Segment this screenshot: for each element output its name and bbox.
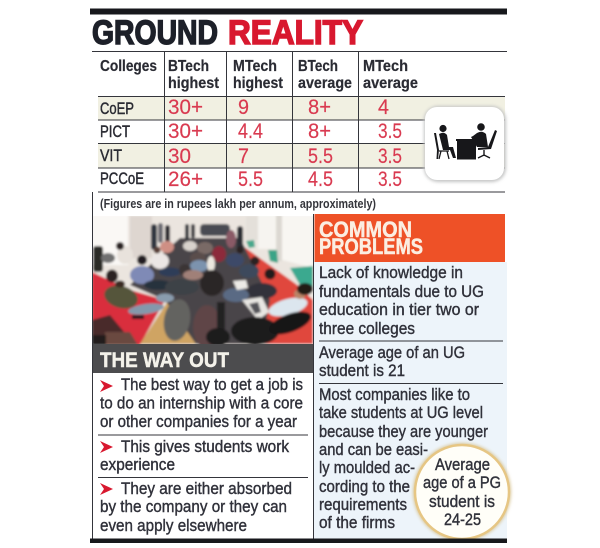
icon: interview at a desk <box>424 106 506 182</box>
row: PCCoE <box>100 168 402 191</box>
problem: companies prefer UG: because they are younger <box>319 423 488 441</box>
point: absorbed or apply <box>100 480 292 535</box>
photo people right <box>223 256 314 345</box>
row: PCCoE: 26+ <box>168 168 203 191</box>
problem: companies prefer UG: requirements <box>319 496 407 514</box>
row: PICT: 30+ <box>168 120 203 143</box>
row: CoEP: 4 <box>378 96 389 119</box>
table: salaries by college <box>92 51 507 192</box>
row: PCCoE: 3.5 <box>378 168 402 191</box>
row: CoEP: 9 <box>238 96 249 119</box>
point: internship: to do an internship with a core <box>100 394 303 412</box>
row: VIT: 30 <box>168 145 191 168</box>
point: absorbed or apply: They are either absorbed <box>121 480 292 498</box>
row: PICT: 8+ <box>308 120 331 143</box>
table header: MTech <box>233 58 277 75</box>
problem: companies prefer UG: and can be easi- <box>319 441 428 459</box>
table header <box>100 58 418 92</box>
row: PICT <box>100 120 402 143</box>
heading band <box>93 344 313 373</box>
row: PICT: PICT <box>100 122 130 141</box>
table header: average <box>298 75 352 92</box>
heading: PROBLEMS <box>319 234 423 259</box>
row: VIT <box>100 145 402 168</box>
bottom rule <box>90 538 507 543</box>
callout: PG student age: student is <box>429 493 495 511</box>
title: GROUND <box>92 14 218 52</box>
problem: UG age <box>319 344 465 380</box>
heading band: THE WAY OUT <box>100 348 229 372</box>
row: PCCoE: 4.5 <box>308 168 333 191</box>
problem: companies prefer UG: Most companies like to <box>319 386 470 404</box>
point: work experience: This gives students work <box>121 438 290 456</box>
row: VIT: 5.5 <box>308 145 333 168</box>
row: CoEP: 30+ <box>168 96 203 119</box>
panel: the way out <box>93 344 313 535</box>
heading <box>314 214 505 262</box>
heading: COMMON <box>319 217 412 242</box>
callout: PG student age <box>413 443 511 541</box>
photo people left <box>93 242 174 319</box>
row: PICT: 4.4 <box>238 120 263 143</box>
row: CoEP <box>100 96 389 119</box>
problem: fundamentals: three colleges <box>319 320 415 338</box>
infographic <box>90 8 513 543</box>
problem: companies prefer UG: of the firms <box>319 514 395 532</box>
problem: companies prefer UG: take students at UG level <box>319 404 483 422</box>
table header: highest <box>168 75 219 92</box>
left frame rule <box>92 192 94 539</box>
problem: UG age: Average age of an UG <box>319 344 465 362</box>
callout: PG student age: age of a PG <box>423 474 501 492</box>
table header: Colleges <box>100 58 157 75</box>
row: PCCoE: PCCoE <box>100 169 144 188</box>
table header: highest <box>233 75 283 92</box>
row: CoEP: 8+ <box>308 96 331 119</box>
problem: UG age: student is 21 <box>319 362 405 380</box>
row: VIT: 3.5 <box>378 145 402 168</box>
table header: BTech <box>168 58 209 75</box>
problem: companies prefer UG: cording to the <box>319 478 410 496</box>
problem: fundamentals: education in tier two or <box>319 301 479 319</box>
row: PICT: 3.5 <box>378 120 402 143</box>
title <box>92 14 363 52</box>
row: CoEP: CoEP <box>100 99 134 118</box>
title: REALITY <box>228 14 363 52</box>
problem: companies prefer UG: ly moulded ac- <box>319 459 415 477</box>
footnote: (Figures are in rupees lakh per annum, approximately) <box>100 197 376 211</box>
point: absorbed or apply: by the company or they can <box>100 498 287 516</box>
point: absorbed or apply: even apply elsewhere <box>100 517 247 535</box>
panel: common problems <box>314 214 511 541</box>
photo people centre <box>161 270 230 349</box>
photo crowd base <box>130 238 270 344</box>
problem: fundamentals: Lack of knowledge in <box>319 264 463 282</box>
point: work experience: experience <box>100 456 175 474</box>
table header: MTech <box>363 58 408 75</box>
point: internship: or other companies for a year <box>100 413 297 431</box>
row: PCCoE: 5.5 <box>238 168 263 191</box>
row: VIT: VIT <box>100 146 122 165</box>
point: work experience <box>100 438 290 474</box>
table header: BTech <box>298 58 338 75</box>
row: VIT: 7 <box>238 145 249 168</box>
callout: PG student age: 24-25 <box>444 511 481 529</box>
photo crowd at back <box>151 223 244 276</box>
photo: students at a placement hall <box>92 215 314 349</box>
point: internship <box>100 376 303 431</box>
problem: fundamentals <box>319 264 484 338</box>
problem: fundamentals: fundamentals due to UG <box>319 283 484 301</box>
point: internship: The best way to get a job is <box>121 376 303 394</box>
table header: average <box>363 75 418 92</box>
problem: companies prefer UG <box>319 386 488 532</box>
callout: PG student age: Average <box>435 456 490 474</box>
top rule <box>90 8 507 14</box>
